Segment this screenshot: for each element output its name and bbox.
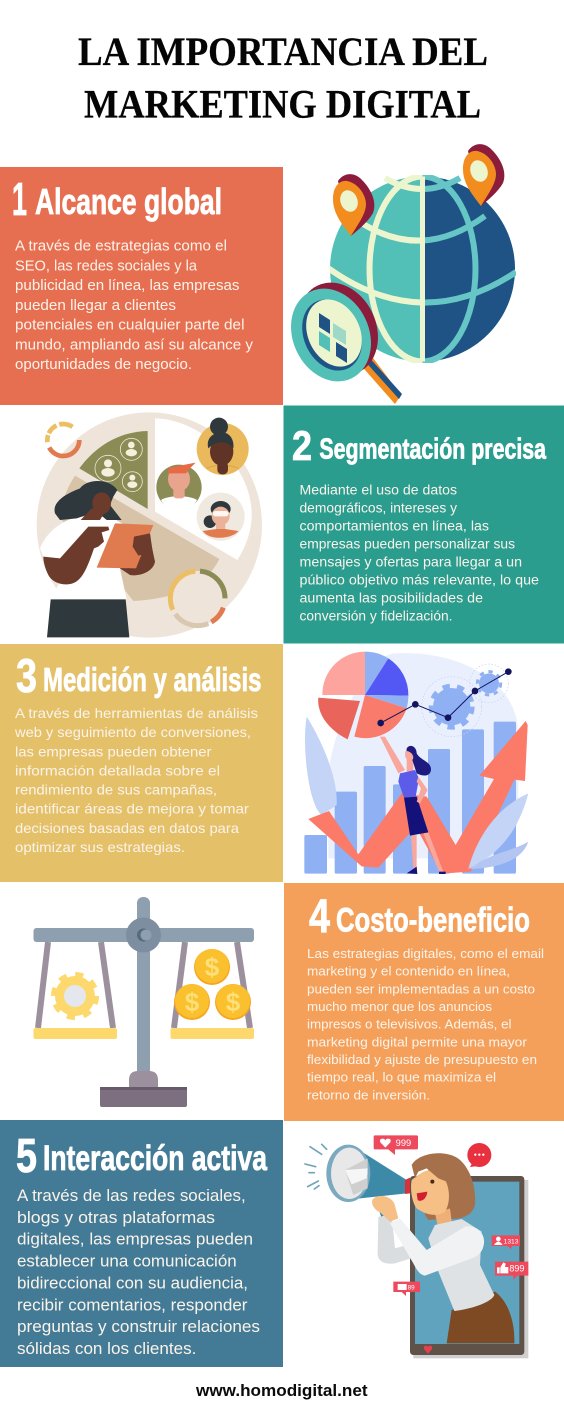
icon: coins: $	[226, 987, 241, 1017]
heading: medicion y analisis: 3	[16, 649, 37, 702]
illustration: data analysis	[304, 652, 528, 874]
text block: costo-beneficio: tiempo real, lo que maximiza el	[307, 1070, 496, 1085]
text block: medicion y analisis: identificar áreas de mejora y tomar	[15, 801, 249, 817]
icon: map pin right	[463, 144, 504, 206]
text block: alcance global: A través de estrategias como el	[15, 238, 227, 254]
text block: segmentacion precisa: Mediante el uso de datos	[300, 482, 457, 498]
text block: segmentacion precisa	[300, 482, 539, 624]
heading: medicion y analisis	[16, 649, 262, 702]
text block: costo-beneficio: flexibilidad y ajuste de presupuesto en	[307, 1052, 537, 1067]
callout: likes 899: 899	[509, 1264, 524, 1274]
icon: smartphone	[410, 1176, 528, 1358]
icon: right leaves	[468, 793, 528, 869]
text block: medicion y analisis: rendimiento de sus campañas,	[15, 782, 217, 798]
icon: hangers	[38, 942, 250, 1028]
panel: alcance global	[0, 167, 283, 405]
heading: alcance global: Alcance global	[35, 181, 222, 222]
illustration: audience segmentation	[37, 412, 262, 638]
text block: interaccion activa: bidireccional con su audiencia,	[17, 1274, 248, 1292]
heading: segmentacion precisa	[292, 422, 547, 469]
footer: website: www.homodigital.net	[195, 1381, 368, 1400]
icon: coins	[174, 949, 251, 1020]
callout: likes 999: 999	[396, 1138, 411, 1148]
icon: avatar top	[197, 418, 249, 475]
icon: globe	[328, 176, 516, 362]
text block: medicion y analisis: las empresas pueden obtener	[15, 743, 212, 759]
icon: gear	[54, 975, 96, 1017]
icon: magnifying glass	[276, 269, 402, 404]
callout: followers 1313: 1313	[504, 1239, 519, 1246]
text block: costo-beneficio: marketing digital permite una mayor	[307, 1034, 528, 1049]
text block: segmentacion precisa: empresas pueden personalizar sus	[300, 536, 515, 552]
text block: costo-beneficio: marketing y el contenido en línea,	[307, 964, 510, 979]
icon: scale stand	[100, 897, 187, 1107]
text block: costo-beneficio: mucho menor que los anuncios	[307, 999, 493, 1014]
heading: interaccion activa: Interacción activa	[43, 1139, 267, 1178]
icon: avatar middle	[156, 463, 202, 511]
chart: small donut	[47, 424, 79, 456]
panel: segmentacion precisa	[284, 406, 564, 644]
icon: woman with tablet	[40, 481, 155, 637]
text block: segmentacion precisa: demográficos, intereses y	[300, 500, 457, 516]
chart: pie background	[37, 412, 262, 638]
title: MARKETING DIGITAL	[84, 82, 481, 126]
icon: coins: $	[205, 952, 220, 982]
text block: interaccion activa: recibir comentarios, responder	[17, 1296, 248, 1314]
callout: messages 89	[393, 1282, 420, 1296]
text block: interaccion activa: A través de las redes sociales,	[17, 1187, 246, 1205]
icon: pans	[34, 1028, 254, 1039]
heading: alcance global	[12, 173, 222, 225]
chart: bar columns	[304, 722, 516, 874]
title: LA IMPORTANCIA DEL	[78, 29, 488, 74]
chart: large donut	[170, 571, 225, 626]
icon: beam	[34, 918, 254, 952]
text block: segmentacion precisa: comportamientos en línea, las	[300, 518, 489, 534]
text block: medicion y analisis: decisiones basadas en datos para	[15, 820, 239, 836]
text block: costo-beneficio: Las estrategias digitales, como el email	[307, 946, 544, 961]
text block: alcance global: potenciales en cualquier parte del	[15, 318, 244, 334]
icon: woman	[378, 1153, 514, 1343]
icon: megaphone	[326, 1145, 410, 1222]
illustration: balance scale	[34, 897, 254, 1107]
panel: costo-beneficio	[284, 883, 564, 1121]
text block: medicion y analisis: información detallada sobre el	[15, 762, 220, 778]
text block: interaccion activa: preguntas y construir relaciones	[17, 1318, 260, 1336]
illustration: globe with pins and magnifier	[276, 144, 516, 404]
callout: followers 1313	[492, 1235, 520, 1249]
text block: medicion y analisis	[14, 705, 258, 855]
callout: likes 999	[374, 1135, 418, 1155]
callout: comment bubble	[467, 1143, 491, 1167]
heading: interaccion activa	[16, 1130, 267, 1183]
text block: interaccion activa: blogs y otras plataformas	[17, 1209, 215, 1227]
text block: costo-beneficio: retorno de inversión.	[307, 1087, 430, 1102]
title	[78, 29, 488, 126]
heading: costo-beneficio: 4	[309, 889, 330, 942]
text block: alcance global	[15, 238, 254, 373]
text block: alcance global: pueden llegar a clientes	[15, 298, 176, 314]
icon: map pin left	[333, 174, 374, 236]
text block: segmentacion precisa: aumenta las posibilidades de	[300, 590, 483, 606]
text block: alcance global: publicidad en línea, las empresas	[15, 278, 239, 294]
chart: line chart	[377, 668, 512, 726]
icon: coins: $	[185, 987, 200, 1017]
text block: costo-beneficio	[307, 946, 544, 1102]
heading: costo-beneficio	[309, 889, 530, 942]
callout: likes 899	[495, 1262, 528, 1280]
icon: group of users	[95, 438, 142, 492]
text block: medicion y analisis: optimizar sus estrategias.	[15, 839, 185, 855]
chart: pie chart	[318, 652, 408, 739]
text block: segmentacion precisa: conversión y fidelización.	[300, 608, 452, 624]
heading: interaccion activa: 5	[16, 1130, 37, 1183]
text block: interaccion activa: establecer una comunicación	[17, 1253, 237, 1271]
text block: costo-beneficio: pueden ser implementadas a un costo	[307, 981, 535, 996]
text block: medicion y analisis: web y seguimiento de conversiones,	[14, 724, 251, 740]
illustration: woman with megaphone	[305, 1135, 528, 1358]
text block: costo-beneficio: impresos o televisivos. Además, el	[307, 1017, 512, 1032]
heading: alcance global: 1	[12, 173, 27, 225]
text block: interaccion activa: sólidas con los clientes.	[17, 1340, 196, 1358]
icon: gears	[422, 664, 508, 737]
text block: interaccion activa: digitales, las empresas pueden	[17, 1231, 253, 1249]
icon: avatar bottom	[197, 493, 245, 541]
text block: medicion y analisis: A través de herramientas de análisis	[15, 705, 258, 721]
heading: medicion y analisis: Medición y análisis	[43, 661, 262, 698]
text block: alcance global: oportunidades de negocio.	[15, 357, 192, 373]
text block: alcance global: SEO, las redes sociales y la	[15, 258, 198, 274]
heading: segmentacion precisa: 2	[292, 422, 312, 469]
icon: left leaf	[305, 717, 337, 815]
text block: segmentacion precisa: mensajes y ofertas para llegar a un	[300, 554, 522, 570]
callout: messages 89: 89	[408, 1285, 415, 1292]
text block: alcance global: mundo, ampliando así su alcance y	[15, 337, 254, 353]
icon: woman pointing	[380, 737, 446, 874]
icon: sound lines	[305, 1144, 327, 1189]
arrow: rising trend	[308, 721, 528, 874]
text block: interaccion activa	[17, 1187, 260, 1358]
panel: interaccion activa	[0, 1120, 283, 1367]
text block: segmentacion precisa: público objetivo más relevante, lo que	[300, 572, 539, 588]
panel: medicion y analisis	[0, 644, 283, 882]
